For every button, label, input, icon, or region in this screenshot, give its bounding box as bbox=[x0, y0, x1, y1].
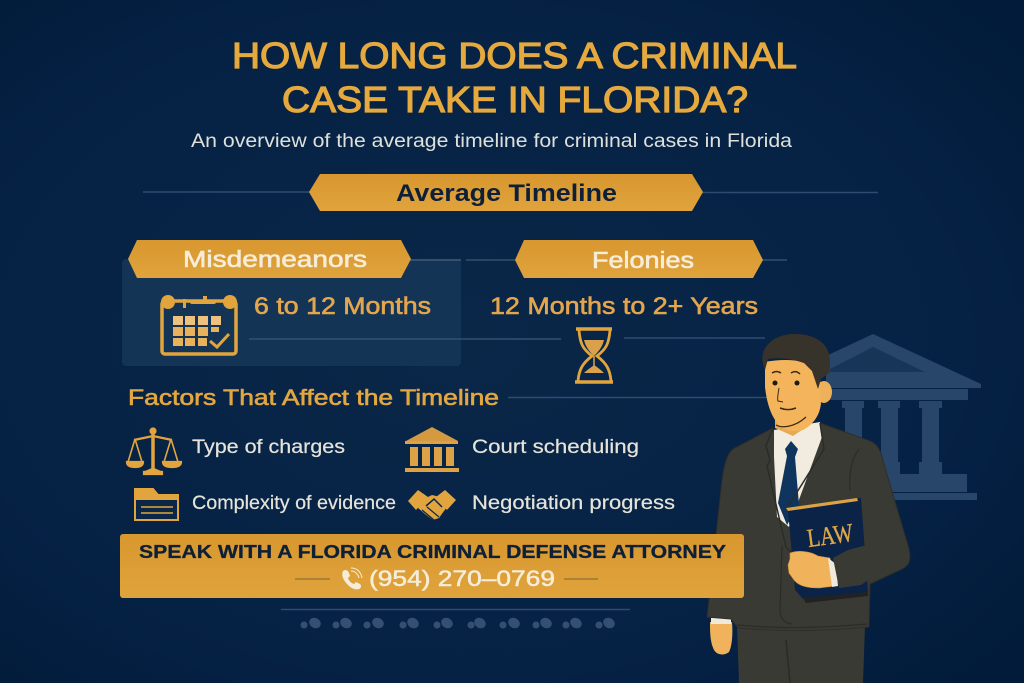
banner: Misdemeanors: Misdemeanors bbox=[183, 246, 367, 272]
icon: hourglass bbox=[575, 329, 613, 382]
subtitle: An overview of the average timeline for criminal cases in Florida bbox=[191, 131, 792, 152]
attorney illustration bbox=[707, 334, 910, 683]
icon: handshake bbox=[408, 490, 456, 520]
jacket bbox=[707, 423, 910, 631]
law book bbox=[786, 498, 868, 603]
icon: folder bbox=[135, 489, 178, 520]
decorative dots row bbox=[300, 616, 617, 630]
trousers bbox=[737, 625, 865, 683]
banner: Average Timeline: Average Timeline bbox=[396, 180, 617, 207]
lapels bbox=[766, 423, 824, 555]
text: felony duration: 12 Months to 2+ Years bbox=[490, 293, 758, 320]
factor: type of charges bbox=[127, 428, 345, 474]
text: court scheduling: Court scheduling bbox=[472, 437, 639, 458]
cta phone number: (954) 270–0769 bbox=[369, 566, 555, 591]
banner: Misdemeanors bbox=[128, 240, 411, 278]
book label: LAW bbox=[805, 518, 855, 553]
banner: Felonies: Felonies bbox=[592, 247, 694, 273]
right hand bbox=[788, 551, 835, 588]
face bbox=[765, 360, 821, 431]
hair bbox=[762, 334, 830, 389]
neck bbox=[775, 410, 811, 436]
left hand bbox=[710, 622, 732, 654]
text: type of charges: Type of charges bbox=[192, 437, 345, 458]
text: complexity of evidence: Complexity of evidence bbox=[192, 493, 396, 514]
text: negotiation progress: Negotiation progress bbox=[472, 493, 675, 514]
icon: scales bbox=[127, 428, 181, 474]
cta heading: SPEAK WITH A FLORIDA CRIMINAL DEFENSE ATTORNEY bbox=[139, 542, 726, 562]
factor: court scheduling bbox=[405, 427, 639, 472]
eyes, brows, mouth bbox=[772, 372, 806, 427]
ear bbox=[816, 381, 832, 403]
title: CASE TAKE IN FLORIDA? bbox=[282, 79, 748, 120]
panel: misdemeanors bbox=[122, 240, 461, 366]
banner: Average Timeline bbox=[309, 174, 703, 211]
icon: calendar bbox=[161, 295, 237, 354]
shirt bbox=[774, 422, 822, 527]
call to action box bbox=[120, 534, 744, 598]
factor: negotiation progress bbox=[408, 490, 675, 520]
panel: felonies bbox=[490, 240, 763, 382]
icon: phone bbox=[342, 570, 361, 589]
title bbox=[232, 35, 797, 120]
factor: complexity of evidence bbox=[135, 489, 396, 520]
icon: courthouse bbox=[405, 427, 459, 472]
banner: Felonies bbox=[515, 240, 763, 278]
heading: factors: Factors That Affect the Timeline bbox=[128, 385, 499, 410]
building illustration bbox=[826, 334, 981, 500]
sleeve bbox=[833, 542, 907, 588]
text: misdemeanor duration: 6 to 12 Months bbox=[254, 293, 431, 320]
tie bbox=[778, 441, 799, 525]
title: HOW LONG DOES A CRIMINAL bbox=[232, 35, 797, 76]
